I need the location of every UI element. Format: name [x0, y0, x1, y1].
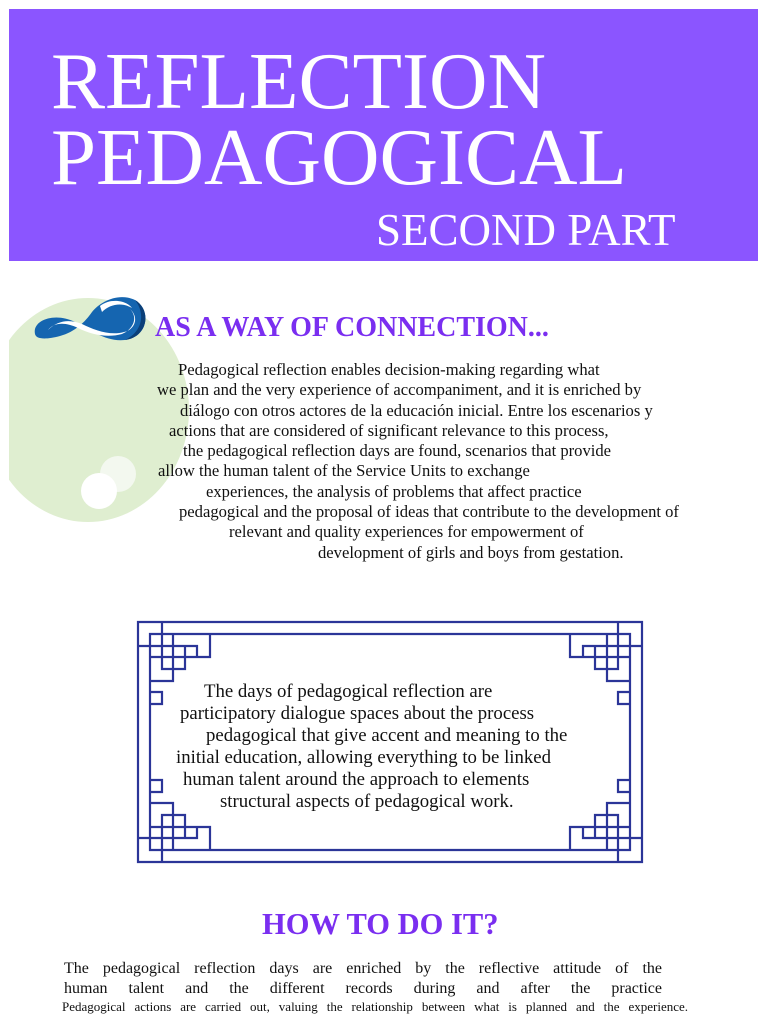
text block: frame quote: pedagogical that give accent and meaning to the [206, 725, 567, 746]
header banner [9, 9, 758, 261]
text block: connection paragraph: Pedagogical reflection enables decision-making regarding what [178, 360, 600, 379]
text block: frame quote: human talent around the approach to elements [183, 769, 529, 790]
text block: connection paragraph: actions that are considered of significant relevance to this process, [169, 421, 609, 440]
text block: connection paragraph: development of girls and boys from gestation. [318, 543, 624, 562]
subtitle: SECOND PART [376, 205, 675, 255]
text block: frame quote: participatory dialogue spaces about the process [180, 703, 534, 724]
title: REFLECTION [51, 36, 546, 126]
text block: frame quote: initial education, allowing everything to be linked [176, 747, 551, 768]
icon: infinity loop [34, 297, 146, 340]
text block: connection paragraph: diálogo con otros actores de la educación inicial. Entre los escenarios y [180, 401, 653, 420]
panel: decorative frame [136, 620, 644, 864]
title: PEDAGOGICAL [51, 112, 627, 202]
text block: how to do it: human talent and the different records during and after the practice [64, 980, 662, 997]
text block: connection paragraph: experiences, the analysis of problems that affect practice [206, 482, 582, 501]
text block: connection paragraph: pedagogical and the proposal of ideas that contribute to the development of [179, 502, 679, 521]
heading: how to do it: HOW TO DO IT? [262, 907, 498, 941]
text block: frame quote: The days of pedagogical reflection are [204, 681, 492, 702]
heading: as a way of connection: AS A WAY OF CONNECTION... [155, 312, 549, 343]
text block: how to do it: Pedagogical actions are carried out, valuing the relationship between what is planned and the experience. [62, 999, 688, 1014]
decoration: green circle [9, 298, 189, 522]
text block: connection paragraph: the pedagogical reflection days are found, scenarios that provide [183, 441, 611, 460]
text block: how to do it: The pedagogical reflection days are enriched by the reflective attitude of the [64, 960, 662, 977]
text block: how to do it [62, 960, 688, 1014]
title [51, 36, 627, 202]
text block: connection paragraph: we plan and the very experience of accompaniment, and it is enriched by [157, 380, 641, 399]
text block: connection paragraph: allow the human talent of the Service Units to exchange [158, 461, 530, 480]
text block: frame quote [176, 681, 567, 812]
text block: connection paragraph: relevant and quality experiences for empowerment of [229, 522, 584, 541]
text block: connection paragraph [157, 360, 679, 562]
text block: frame quote: structural aspects of pedagogical work. [220, 791, 514, 812]
